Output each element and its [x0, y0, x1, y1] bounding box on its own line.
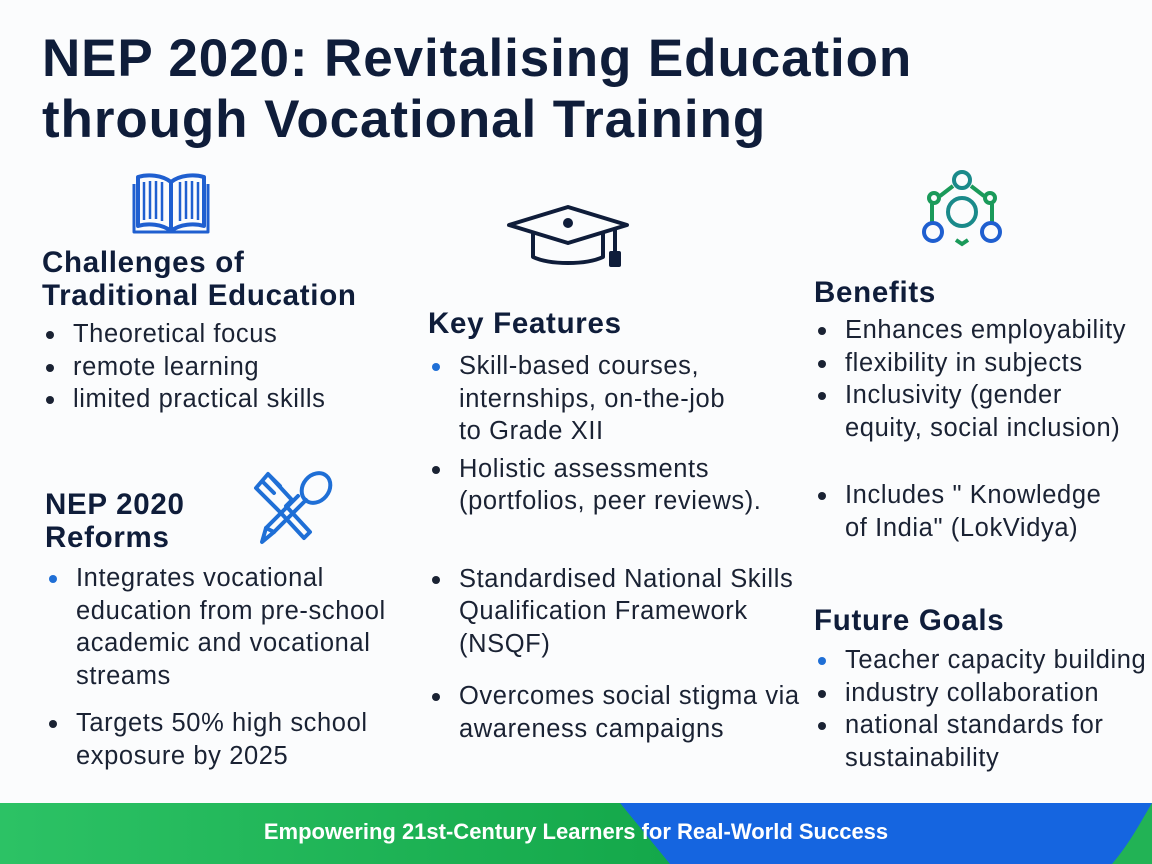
list: key features: Qualification Framework — [459, 597, 748, 625]
list: reforms: academic and vocational — [76, 629, 370, 657]
heading: future goals: Future Goals — [814, 604, 1004, 637]
heading: challenges: Challenges of — [42, 246, 245, 279]
list: benefits — [818, 316, 1126, 542]
heading: challenges: Traditional Education — [42, 279, 357, 312]
list: reforms: education from pre-school — [76, 596, 386, 624]
footer banner — [0, 803, 1152, 864]
list: key features: awareness campaigns — [459, 714, 724, 742]
icon: network — [922, 170, 1002, 246]
list: benefits: flexibility in subjects — [845, 348, 1083, 376]
heading: challenges — [42, 246, 357, 312]
list: key features: to Grade XII — [459, 417, 604, 445]
list: key features: (NSQF) — [459, 630, 550, 658]
heading: reforms: NEP 2020 — [45, 488, 185, 521]
list: future goals: industry collaboration — [845, 678, 1099, 706]
list: key features: Holistic assessments — [459, 454, 709, 482]
heading: reforms — [45, 488, 185, 554]
list: key features: Skill-based courses, — [459, 352, 699, 380]
list: benefits: Enhances employability — [845, 316, 1126, 344]
title — [42, 29, 912, 149]
heading: benefits: Benefits — [814, 276, 936, 309]
list: reforms: Integrates vocational — [76, 564, 324, 592]
list: reforms: streams — [76, 662, 171, 690]
heading: reforms: Reforms — [45, 521, 170, 554]
list: challenges: remote learning — [73, 352, 259, 380]
list: benefits: Includes " Knowledge — [845, 481, 1101, 509]
list: reforms — [49, 564, 386, 770]
list: key features: Standardised National Skills — [459, 564, 793, 592]
list: key features: Overcomes social stigma via — [459, 682, 800, 710]
list: future goals: Teacher capacity building — [845, 646, 1146, 674]
list: challenges — [46, 320, 325, 413]
list: benefits: of India" (LokVidya) — [845, 514, 1078, 542]
list: challenges: limited practical skills — [73, 385, 325, 413]
list: key features: internships, on-the-job — [459, 384, 725, 412]
title: through Vocational Training — [42, 90, 766, 149]
list: challenges: Theoretical focus — [73, 320, 277, 348]
icon: graduation cap — [506, 205, 630, 267]
list: benefits: Inclusivity (gender — [845, 381, 1062, 409]
title: NEP 2020: Revitalising Education — [42, 29, 912, 88]
list: key features — [432, 352, 800, 742]
heading: key features: Key Features — [428, 307, 622, 340]
list: reforms: exposure by 2025 — [76, 742, 288, 770]
icon: book — [132, 173, 210, 234]
icon: fork and pencil — [254, 471, 332, 544]
footer text: Empowering 21st-Century Learners for Real-World Success — [264, 819, 888, 844]
list: future goals: sustainability — [845, 744, 999, 772]
list: key features: (portfolios, peer reviews). — [459, 487, 761, 515]
list: future goals: national standards for — [845, 711, 1103, 739]
list: benefits: equity, social inclusion) — [845, 414, 1120, 442]
list: reforms: Targets 50% high school — [76, 709, 368, 737]
list: future goals — [818, 646, 1146, 772]
